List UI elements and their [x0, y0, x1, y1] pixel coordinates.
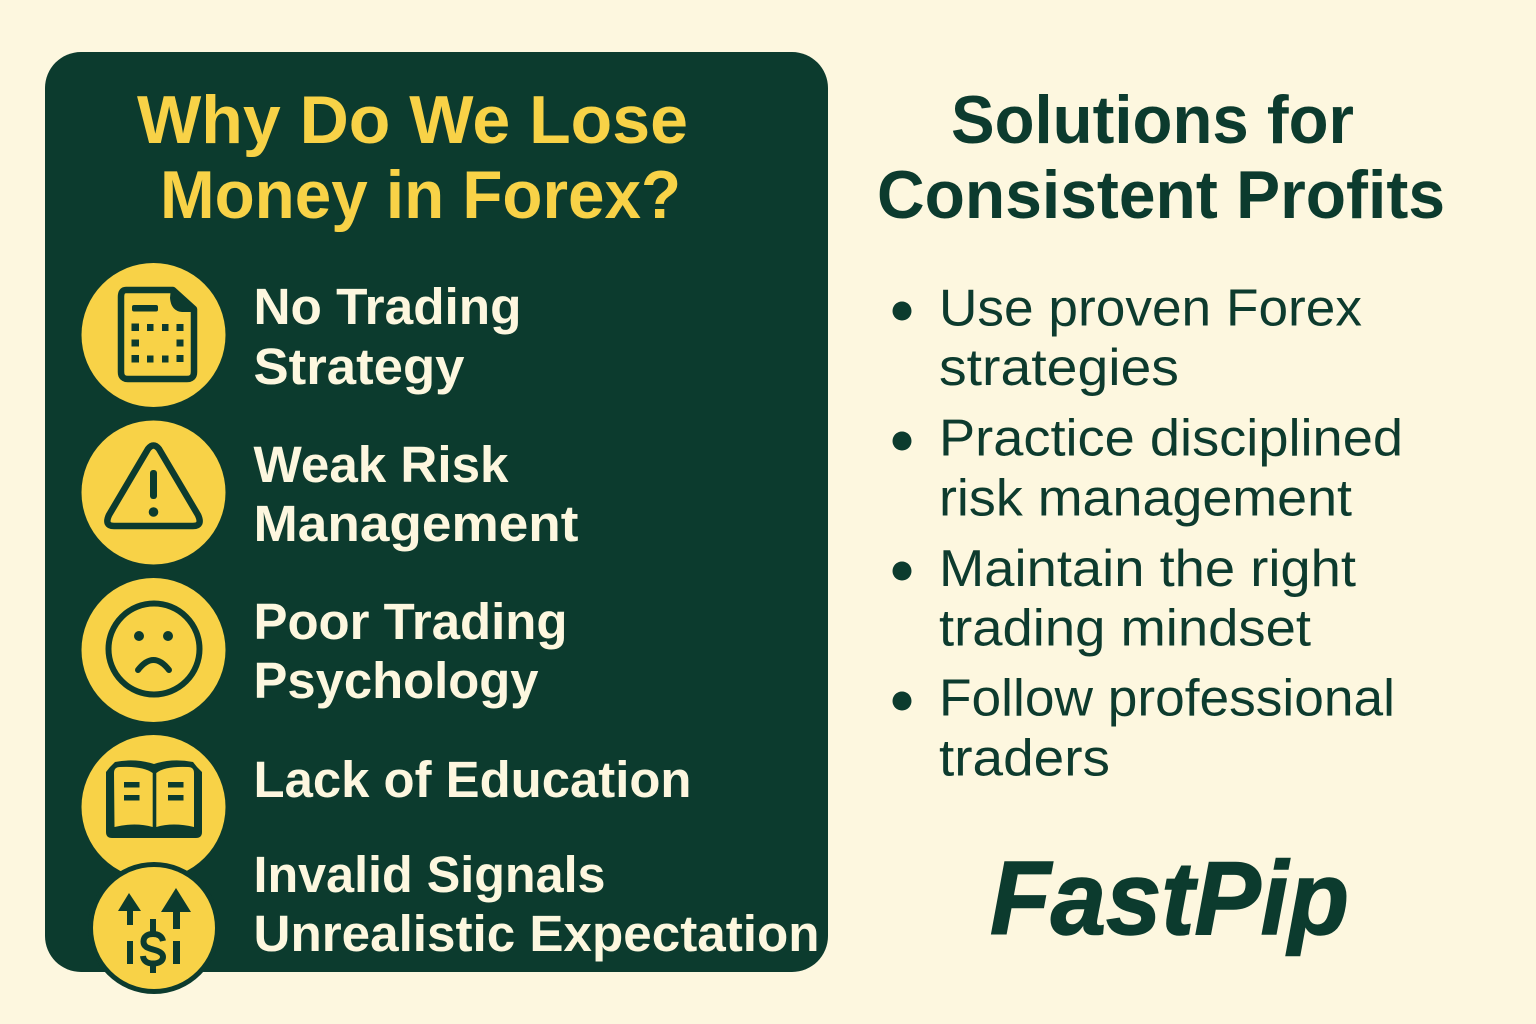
- text: lack of education: Lack of Education: [254, 751, 692, 808]
- text: weak risk management: Management: [254, 495, 579, 552]
- text: no trading strategy: Strategy: [254, 338, 465, 395]
- icon: open book: [82, 735, 226, 879]
- text: poor trading psychology: Poor Trading: [254, 593, 568, 650]
- icon: rising arrows and dollar: [88, 862, 220, 994]
- item: mindset: Maintain the right: [939, 540, 1357, 598]
- icon: sad face: [82, 578, 226, 722]
- text: poor trading psychology: Psychology: [254, 652, 539, 709]
- panel: causes: [45, 52, 828, 994]
- heading: why do we lose money: Why Do We Lose: [137, 82, 688, 158]
- heading: solutions for consistent profits: Consistent Profits: [877, 157, 1445, 233]
- logo: FastPip: FastPip: [990, 841, 1349, 957]
- item: proven strategies: [892, 280, 1362, 397]
- item: proven strategies: Use proven Forex: [939, 280, 1362, 338]
- heading: solutions for consistent profits: Solutions for: [951, 82, 1354, 158]
- item: mindset: trading mindset: [939, 600, 1312, 658]
- heading: why do we lose money: [137, 82, 688, 233]
- text: poor trading psychology: [254, 593, 568, 709]
- text: invalid signals unrealistic expectation: Unrealistic Expectation: [254, 905, 820, 962]
- heading: solutions for consistent profits: [877, 82, 1445, 233]
- item: professional traders: traders: [939, 730, 1110, 788]
- text: weak risk management: [254, 436, 579, 552]
- item: professional traders: Follow professional: [939, 670, 1395, 728]
- text: weak risk management: Weak Risk: [254, 436, 509, 493]
- icon: warning triangle: [82, 420, 226, 564]
- text: invalid signals unrealistic expectation: [254, 846, 820, 962]
- heading: why do we lose money: Money in Forex?: [160, 157, 681, 233]
- item: risk management: Practice disciplined: [939, 410, 1403, 468]
- item: mindset: [892, 540, 1357, 658]
- solutions list: [892, 280, 1403, 788]
- item: professional traders: [892, 670, 1395, 788]
- text: no trading strategy: No Trading: [254, 278, 522, 335]
- text: no trading strategy: [254, 278, 522, 395]
- text: invalid signals unrealistic expectation: Invalid Signals: [254, 846, 606, 903]
- icon: strategy document: [82, 263, 226, 407]
- item: proven strategies: strategies: [939, 339, 1179, 397]
- item: risk management: [892, 410, 1403, 528]
- item: risk management: risk management: [939, 470, 1353, 528]
